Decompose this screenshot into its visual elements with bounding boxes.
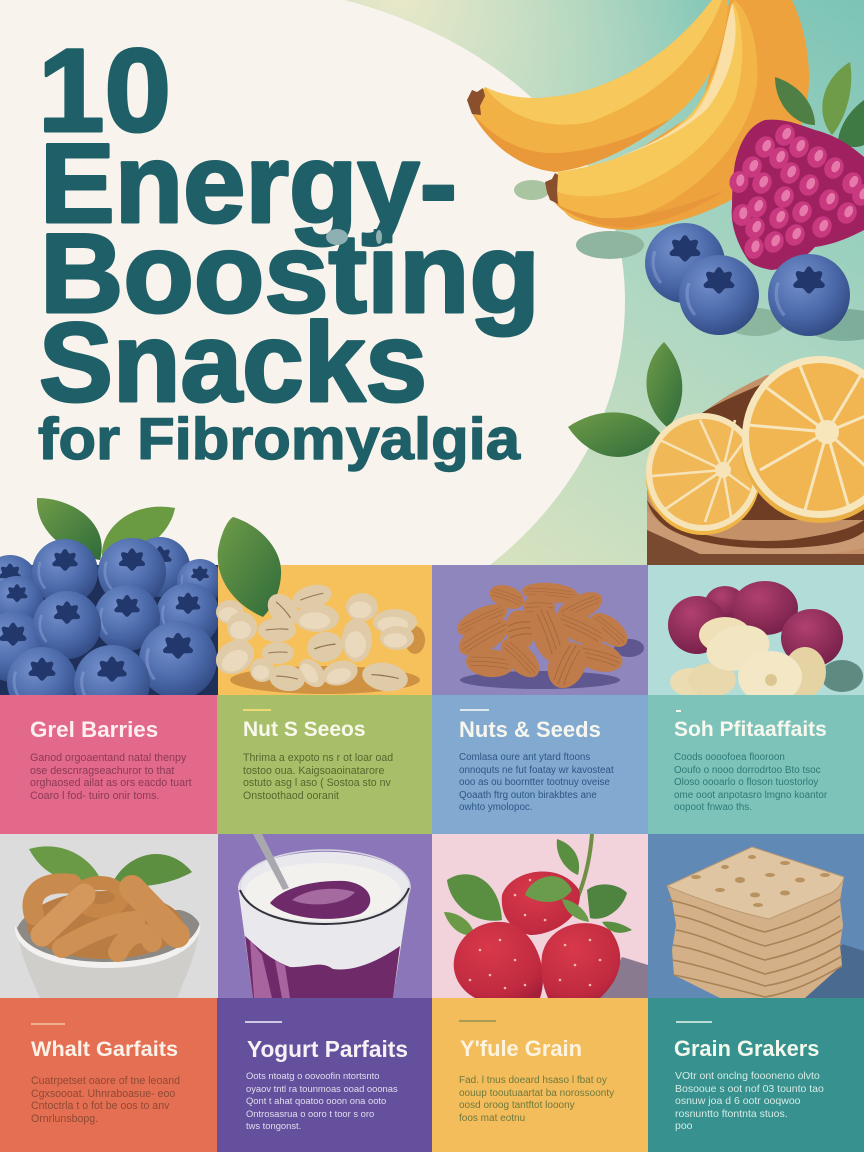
image: plums and banana slices on teal <box>648 565 864 703</box>
text block: ose descnragseachuror to that <box>30 764 174 776</box>
image: blueberries <box>0 498 223 721</box>
text block <box>30 752 192 802</box>
text block: onnoquts ne fut foatay wr kavosteat <box>459 764 614 776</box>
text block: oyaov tntl ra tounmoas ooad ooonas <box>246 1082 398 1094</box>
text block: Oloso oooarlo o floson tuostorloy <box>674 777 818 788</box>
image: stacked crackers <box>648 834 864 998</box>
text block: foos mat eotnu <box>459 1112 525 1124</box>
icon: blueberries <box>645 223 864 341</box>
heading: Nut S Seeos <box>243 718 366 741</box>
text block <box>31 1075 180 1124</box>
panel: Nuts & Seeds <box>432 695 648 834</box>
icon: orange slices in bowl <box>568 342 864 565</box>
heading: Nuts & Seeds <box>459 717 601 742</box>
title: Energy- <box>40 121 457 246</box>
text block: VOtr ont onclng foooneno olvto <box>675 1070 820 1082</box>
text block: rosnuntto ftontnta stuos. <box>675 1108 788 1120</box>
image: strawberries <box>432 834 648 998</box>
icon: raspberry <box>728 62 864 270</box>
text block: owhto ymolopoc. <box>459 802 533 813</box>
accent rule <box>676 710 681 712</box>
title: 10 <box>38 25 171 157</box>
text block: orghaosed ailat as ors eacdo tuart <box>30 777 192 789</box>
icon: bananas <box>467 0 809 259</box>
accent rule <box>460 709 489 711</box>
text block: osnuw joa d 6 ootr ooqwoo <box>675 1095 801 1107</box>
text block: poo <box>675 1120 693 1132</box>
text block: Coods oooofoea flooroon <box>674 752 785 763</box>
text block: tws tongonst. <box>246 1120 301 1131</box>
text block: oopoot fnwao ths. <box>674 802 752 813</box>
accent rule <box>676 1021 712 1023</box>
text block: Cgxsoooat. Uhnraboasue- eoo <box>31 1088 175 1100</box>
text block: Fad. l tnus doeard hsaso l fbat oy <box>459 1075 607 1086</box>
text block: Qoaath ftrg outon birakbtes ane <box>459 790 597 800</box>
heading: Yogurt Parfaits <box>247 1036 408 1062</box>
text block: Bosooue s oot nof 03 tounto tao <box>675 1082 824 1094</box>
panel: Yfule Grain <box>432 998 648 1152</box>
heading: Soh Pfitaaffaits <box>674 718 827 741</box>
text block: oouup tooutuaartat ba norossoonty <box>459 1088 614 1098</box>
panel: Nut S Seeds <box>217 695 432 834</box>
text block: oosd oroog tantftot looony <box>459 1100 575 1111</box>
text block: Qont t ahat qoatoo ooon ona ooto <box>246 1095 386 1106</box>
header background <box>0 0 864 565</box>
heading: Y'fule Grain <box>460 1036 582 1061</box>
title: Snacks <box>39 300 427 425</box>
text block: Ornrlunsbopg. <box>31 1112 98 1124</box>
text block <box>243 752 393 802</box>
text block: Onstoothaod ooranit <box>243 790 339 802</box>
image: almonds on purple <box>432 565 648 695</box>
title <box>38 25 540 472</box>
accent rule <box>245 1021 282 1023</box>
text block <box>459 1075 614 1124</box>
text block: Oots ntoatg o oovoofin ntortsnto <box>246 1070 379 1081</box>
text block: ostuto asg l aso ( Sostoa sto nv <box>243 777 391 789</box>
panel: Yogurt Parfaits <box>217 998 432 1152</box>
text block <box>246 1070 398 1131</box>
text block: Ontrosasrua o ooro t toor s oro <box>246 1108 374 1118</box>
text block: Comlasa oure ant ytard ftoons <box>459 752 590 763</box>
accent rule <box>459 1020 496 1022</box>
text block: Ganod orgoaentand natal thenpy <box>30 752 186 764</box>
text block: tostoo oua. Kaigsoaoinatarore <box>243 764 384 776</box>
text block <box>675 1070 824 1132</box>
text block: Ooufo o nooo dorrodrtoo Bto tsoc <box>674 764 821 776</box>
image: wheat snacks in bowl <box>0 834 218 998</box>
accent rule <box>243 709 271 711</box>
text block: Cuatrpetset oaore of tne leoand <box>31 1075 180 1087</box>
heading: Whalt Garfaits <box>31 1036 178 1061</box>
text block: Coaro l fod- tuiro onir toms. <box>30 790 160 802</box>
text block <box>674 752 827 813</box>
panel: Grel Barries <box>0 695 217 834</box>
text block <box>459 752 614 813</box>
text block: Cntoctrla t o fot be oos to anv <box>31 1100 169 1112</box>
image: nuts on yellow <box>210 517 432 695</box>
panel: Soh Pfitaaffaits <box>648 695 864 834</box>
heading: Grain Grakers <box>674 1036 819 1061</box>
panel: Whalt Garfaits <box>0 998 217 1152</box>
accent rule <box>31 1023 65 1025</box>
image: yogurt parfait <box>218 834 432 998</box>
text block: Thrima a expoto ns r ot loar oad <box>243 752 393 764</box>
title: for Fibromyalgia <box>38 407 521 472</box>
panel: Grain Grakers <box>648 998 864 1152</box>
heading: Grel Barries <box>30 717 158 742</box>
title: Boosting <box>40 211 540 336</box>
text block: ome ooot anpotasro lmgno koantor <box>674 790 827 800</box>
text block: ooo as ou boorntter tootnuy oveise <box>459 777 610 788</box>
